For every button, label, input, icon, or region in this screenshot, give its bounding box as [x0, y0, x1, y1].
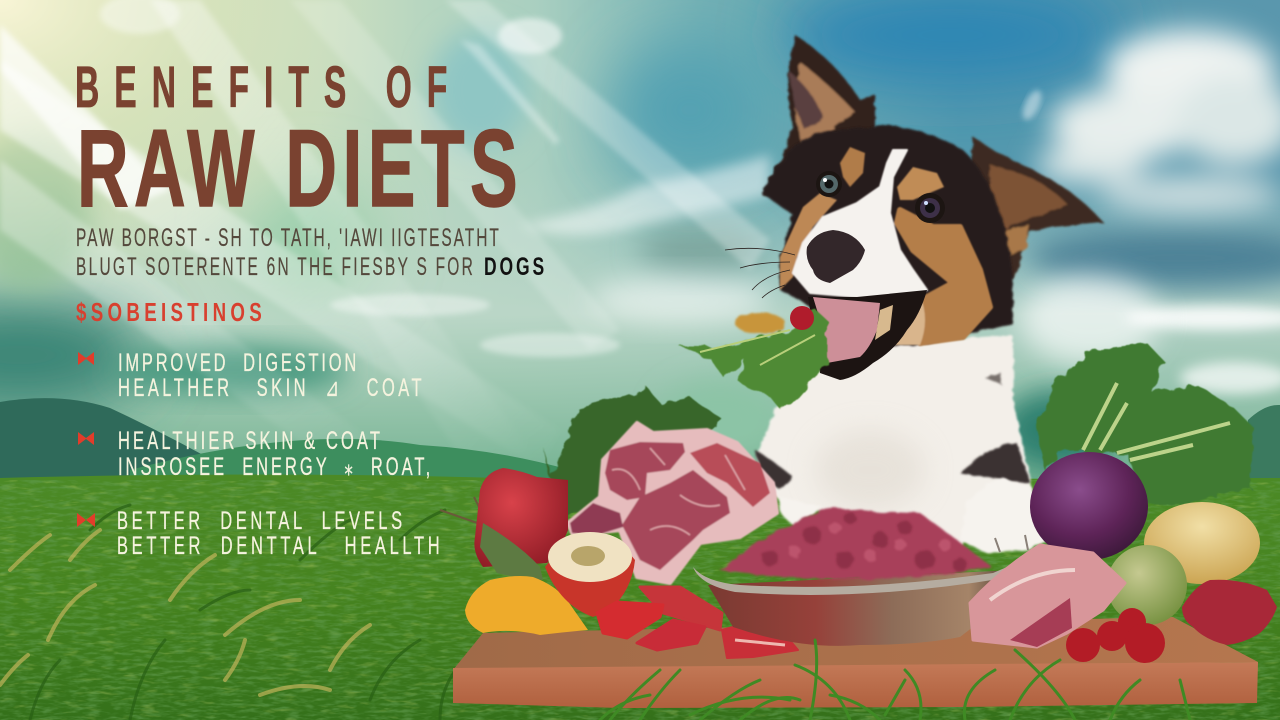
- dog body: [756, 335, 1032, 545]
- benefit 3: BETTER DENTAL LEVELS: [117, 508, 402, 535]
- leaf: [480, 523, 543, 580]
- dog shoulder patches: [755, 372, 1030, 490]
- tan left cheek: [780, 193, 837, 290]
- title line 2: RAW DIETS: [77, 106, 518, 230]
- subtitle line 1: PAW BORGST - SH TO TATH, 'IAWI IIGTESATHT: [76, 224, 499, 252]
- back greens behind steak: [543, 387, 723, 518]
- dog: [725, 35, 1103, 553]
- greens in mouth: [680, 306, 827, 412]
- benefit 3: [77, 508, 440, 560]
- tan right cheek: [897, 210, 990, 343]
- benefit 2: INSROSEE ENERGY ⁎ ROAT,: [118, 454, 430, 481]
- distant hills: [0, 398, 1280, 490]
- right eye: [915, 193, 945, 223]
- benefit 3: BETTER DENTTAL HEALLTH: [117, 533, 440, 560]
- open mouth: [808, 290, 927, 380]
- left eye: [816, 171, 842, 197]
- tan right brow: [897, 167, 944, 200]
- marbled muscle B: [690, 443, 770, 507]
- bullet icon: [77, 513, 95, 527]
- left ear: [762, 35, 875, 195]
- foreground grass: [600, 640, 1190, 720]
- marbled muscle D: [570, 503, 623, 535]
- marbled muscle A: [605, 442, 685, 500]
- benefit 1: HEALTHER SKIN ⊿ COAT: [118, 375, 422, 402]
- sky background: [0, 0, 1280, 490]
- apple stem: [440, 497, 488, 525]
- sun rays: [0, 0, 770, 470]
- benefit 2: HEALTHIER SKIN & COAT: [118, 428, 380, 455]
- paw toes: [995, 535, 1028, 552]
- clouds: [100, 0, 1280, 394]
- section heading: $SOBEISTINOS: [76, 297, 262, 327]
- bullet icon: [78, 352, 94, 365]
- subtitle emphasis: DOGS: [484, 252, 544, 281]
- title line 1: BENEFITS OF: [75, 56, 447, 120]
- cutting board: [453, 617, 1258, 708]
- grass field: [0, 474, 1280, 720]
- red meat slices: [597, 587, 798, 658]
- tan mouth corner: [890, 295, 925, 345]
- whiskers: [725, 248, 795, 298]
- cherry tomatoes: [1066, 608, 1165, 663]
- right ear: [965, 137, 1103, 280]
- steak: [568, 423, 777, 583]
- subtitle: [76, 224, 544, 281]
- white blaze and muzzle: [793, 150, 927, 297]
- benefits list: [77, 350, 440, 560]
- tan left brow: [840, 147, 865, 187]
- teeth: [875, 305, 893, 340]
- red apple: [474, 468, 568, 567]
- yellow pepper: [465, 576, 588, 635]
- front paws: [779, 478, 1050, 553]
- right vegetables: [970, 343, 1277, 663]
- halved apple: [545, 532, 635, 617]
- title: [75, 56, 518, 230]
- green fruit: [1107, 545, 1187, 625]
- nose: [807, 230, 865, 283]
- benefit 1: IMPROVED DIGESTION: [118, 350, 356, 377]
- greens stems: [1083, 383, 1230, 460]
- bowl of minced meat: [693, 507, 1023, 646]
- meat slab: [970, 545, 1125, 647]
- benefit 1: [78, 350, 422, 402]
- subtitle line 2: BLUGT SOTERENTE 6N THE FIESBY S FOR: [76, 253, 473, 281]
- marbled muscle C: [622, 470, 730, 570]
- tongue: [813, 297, 880, 363]
- bullet icon: [78, 432, 94, 445]
- head: [762, 125, 1013, 345]
- beet: [1030, 452, 1148, 560]
- benefit 2: [78, 428, 430, 481]
- leafy greens: [1035, 343, 1253, 503]
- fur shading: [815, 430, 925, 510]
- potato: [1144, 502, 1260, 584]
- strawberry: [1182, 580, 1277, 645]
